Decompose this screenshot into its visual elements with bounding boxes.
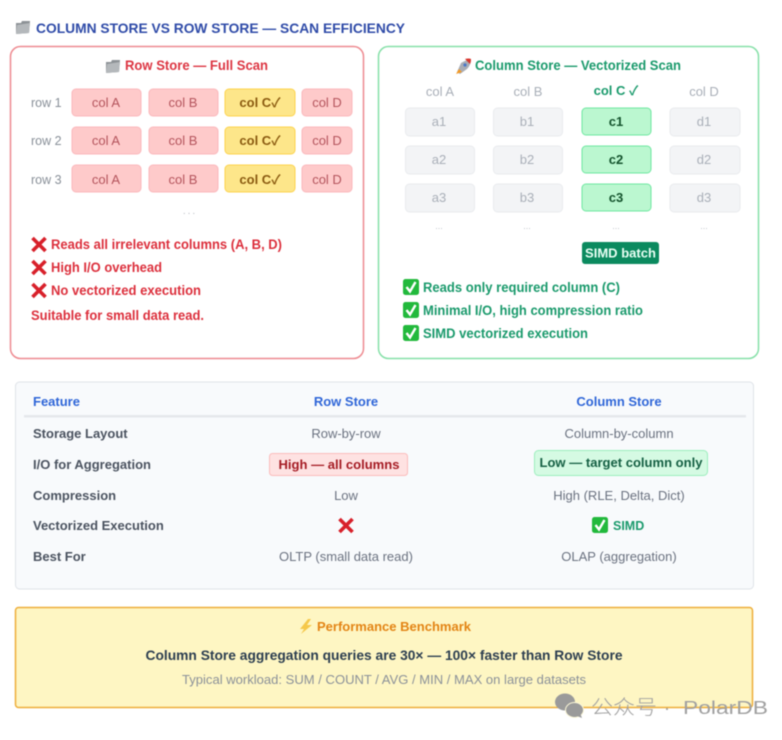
- panel: column store: [378, 46, 758, 358]
- column ellipses: ...: [700, 221, 708, 231]
- column ellipses: ...: [435, 221, 443, 231]
- title text: COLUMN STORE VS ROW STORE — SCAN EFFICIENCY: [36, 20, 406, 36]
- row labels: [31, 96, 62, 187]
- column D cells: d3: [697, 190, 711, 205]
- column store benefits list: SIMD vectorized execution: [423, 326, 588, 341]
- column B cells: b1: [520, 114, 534, 129]
- row 1 cells: col A: [92, 95, 120, 110]
- SIMD batch badge: [582, 242, 659, 264]
- column C cells: c2: [609, 152, 623, 167]
- watermark text: [591, 696, 768, 719]
- row store heading: Row Store — Full Scan: [125, 57, 268, 73]
- row: compression: Low: [334, 488, 359, 503]
- row store drawbacks list: [31, 237, 282, 323]
- row: compression: Compression: [33, 488, 116, 503]
- column store benefits list: [403, 279, 643, 341]
- row: IO for aggregation: Low — target column only: [540, 455, 703, 470]
- table header: [24, 394, 746, 418]
- row 3 cells: col A: [92, 172, 120, 187]
- row 1 cells: col D: [312, 95, 342, 110]
- row 1 cells: col B: [169, 95, 197, 110]
- table header: Column Store: [576, 394, 662, 409]
- column B cells: b2: [520, 152, 534, 167]
- row: best for: OLTP (small data read): [279, 549, 413, 564]
- column ellipses: ...: [612, 221, 620, 231]
- row store drawbacks list: No vectorized execution: [51, 283, 201, 298]
- row 2 cells: col A: [92, 133, 120, 148]
- row: storage layout: Column-by-column: [564, 426, 674, 441]
- row: vectorized execution: SIMD: [613, 519, 644, 533]
- icon: folder: [16, 21, 30, 34]
- panel: row store: [10, 46, 364, 358]
- column headers: col B: [514, 84, 542, 99]
- column ellipses: ...: [523, 221, 531, 231]
- row: compression: [33, 488, 685, 503]
- benchmark note: Typical workload: SUM / COUNT / AVG / MIN / MAX on large datasets: [182, 672, 586, 687]
- row 2 cells: col C✓: [239, 133, 281, 148]
- row: storage layout: Row-by-row: [311, 426, 381, 441]
- row store drawbacks list: Suitable for small data read.: [31, 308, 204, 323]
- column C cells: c1: [609, 114, 623, 129]
- column store benefits list: Minimal I/O, high compression ratio: [423, 303, 643, 318]
- column B cells: [494, 108, 562, 212]
- table header: Feature: [33, 394, 80, 409]
- benchmark statement: Column Store aggregation queries are 30× — 100× faster than Row Store: [146, 647, 623, 663]
- row: IO for aggregation: High — all columns: [278, 457, 400, 472]
- column A cells: a2: [432, 152, 446, 167]
- row: storage layout: [33, 426, 674, 441]
- column A cells: a3: [432, 190, 446, 205]
- row 3 cells: col C✓: [239, 172, 281, 187]
- row 2 cells: col B: [169, 133, 197, 148]
- column headers: col A: [426, 84, 454, 99]
- row 3 cells: col D: [312, 172, 342, 187]
- watermark text: PolarDB: [683, 698, 768, 718]
- table header: Row Store: [314, 394, 378, 409]
- column ellipses: [435, 221, 708, 231]
- benchmark heading: Performance Benchmark: [317, 619, 472, 634]
- row 2 cells: col D: [312, 133, 342, 148]
- column store benefits list: Reads only required column (C): [423, 280, 620, 295]
- icon: wechat: [555, 694, 584, 718]
- title: [16, 20, 406, 36]
- column headers: [426, 83, 719, 99]
- column D cells: d2: [697, 152, 711, 167]
- watermark text: 公众号: [591, 696, 657, 719]
- row 3 cells: col B: [169, 172, 197, 187]
- row 1 cells: [72, 89, 352, 116]
- row: best for: OLAP (aggregation): [561, 549, 677, 564]
- column A cells: [406, 108, 474, 212]
- icon: rocket: [456, 58, 471, 74]
- column headers: col D: [689, 84, 719, 99]
- ellipsis: ...: [183, 206, 197, 217]
- icon: lightning: [300, 619, 312, 634]
- row: best for: Best For: [33, 549, 86, 564]
- row labels: row 1: [31, 96, 62, 110]
- column headers: col C ✓: [594, 83, 639, 98]
- column D cells: d1: [697, 114, 711, 129]
- row: compression: High (RLE, Delta, Dict): [553, 488, 685, 503]
- row: storage layout: Storage Layout: [33, 426, 128, 441]
- watermark text: ·: [664, 698, 670, 718]
- column store heading: Column Store — Vectorized Scan: [475, 57, 681, 73]
- panel: performance benchmark: [16, 608, 752, 708]
- row labels: row 3: [31, 173, 62, 187]
- column B cells: b3: [520, 190, 534, 205]
- row 2 cells: [72, 127, 352, 154]
- row: IO for aggregation: I/O for Aggregation: [33, 457, 151, 472]
- row 1 cells: col C✓: [239, 95, 281, 110]
- SIMD batch badge: SIMD batch: [585, 246, 656, 260]
- row: best for: [33, 549, 677, 564]
- column A cells: a1: [432, 114, 446, 129]
- row: IO for aggregation: [33, 450, 708, 476]
- row: vectorized execution: [33, 517, 644, 533]
- row labels: row 2: [31, 134, 62, 148]
- panel: comparison table: [16, 382, 754, 589]
- watermark: [555, 694, 768, 719]
- row: vectorized execution: Vectorized Execution: [33, 518, 164, 533]
- column D cells: [670, 108, 740, 212]
- row store drawbacks list: Reads all irrelevant columns (A, B, D): [51, 237, 282, 252]
- column C cells: c3: [609, 190, 623, 205]
- row 3 cells: [72, 165, 352, 192]
- column C cells: [582, 108, 651, 211]
- icon: folder: [106, 60, 120, 73]
- row store drawbacks list: High I/O overhead: [51, 260, 162, 275]
